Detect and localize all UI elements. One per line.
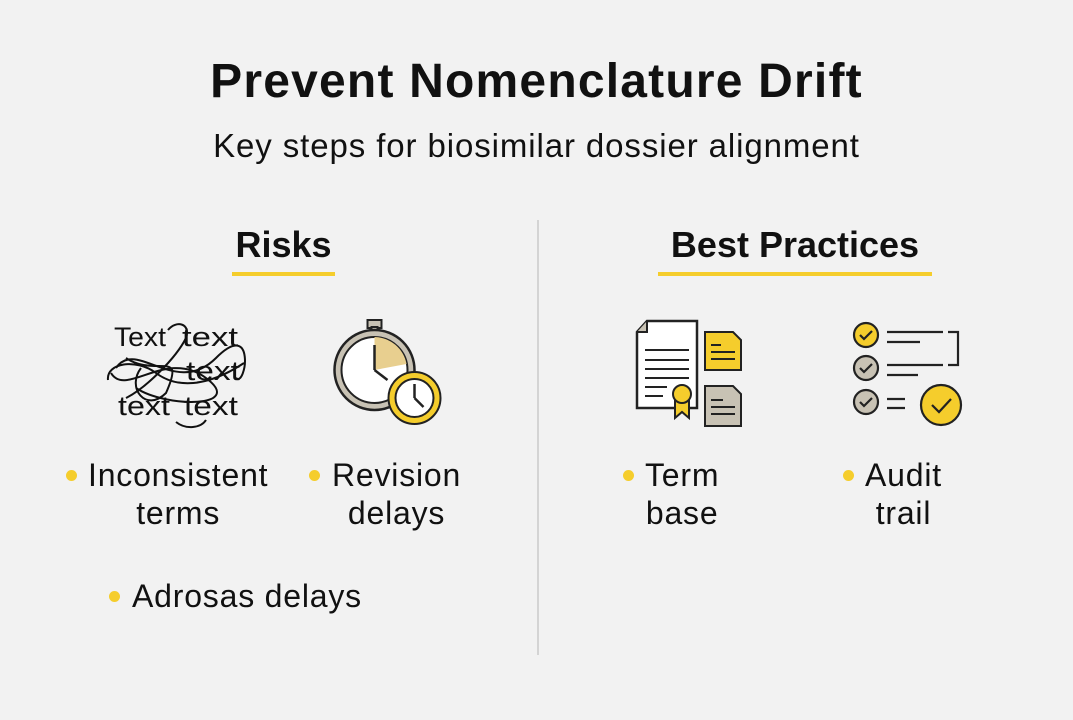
label: revision delays: Revision	[332, 457, 461, 493]
label: inconsistent terms	[66, 457, 268, 531]
label: term base	[623, 457, 719, 531]
label: audit trail: Audit	[865, 457, 942, 493]
panel: best practices	[623, 224, 962, 531]
label: inconsistent terms: terms	[136, 495, 220, 531]
label: revision delays	[309, 457, 461, 531]
icon: audit checklist	[852, 322, 962, 426]
subtitle: Key steps for biosimilar dossier alignment	[213, 127, 860, 164]
divider	[537, 220, 539, 655]
label: term base: base	[646, 495, 718, 531]
label: adrosas delays: Adrosas delays	[132, 578, 362, 614]
icon: tangled text: text	[184, 391, 239, 421]
title: Prevent Nomenclature Drift	[210, 55, 863, 108]
label: audit trail: trail	[876, 495, 931, 531]
label: inconsistent terms: Inconsistent	[88, 457, 268, 493]
icon: stopwatch	[333, 319, 442, 425]
panel: risks	[66, 224, 461, 614]
icon: tangled text: text	[118, 391, 171, 421]
icon: tangled text	[106, 322, 246, 428]
icon: tangled text: Text	[114, 322, 167, 352]
icon: tangled text: text	[186, 356, 241, 386]
icon: term base documents	[636, 320, 742, 427]
label: term base: Term	[645, 457, 719, 493]
icon: tangled text: text	[182, 322, 239, 352]
label: audit trail	[843, 457, 942, 531]
heading: risks: Risks	[235, 224, 332, 265]
label: revision delays: delays	[348, 495, 445, 531]
heading: best practices: Best Practices	[671, 224, 919, 265]
